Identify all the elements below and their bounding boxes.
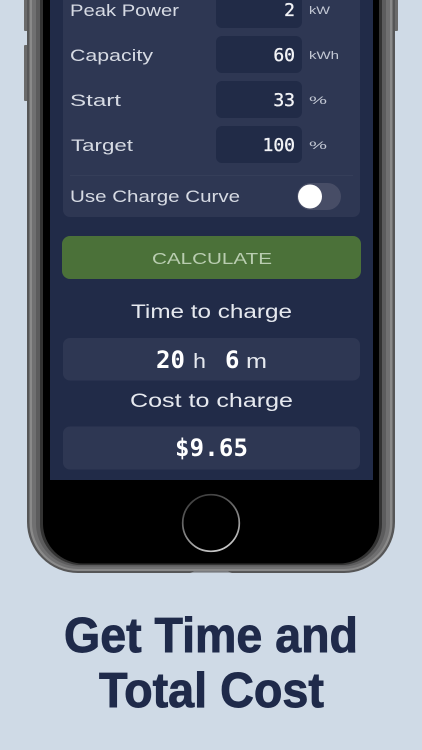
row: start: % bbox=[309, 95, 327, 107]
toggle bbox=[297, 183, 341, 210]
title bbox=[64, 609, 358, 718]
calculate button: CALCULATE bbox=[152, 251, 272, 268]
app screen bbox=[50, 0, 373, 480]
result: time: h bbox=[193, 351, 206, 373]
row: peak power bbox=[70, 0, 331, 28]
row: target: % bbox=[309, 140, 327, 152]
row: target bbox=[71, 126, 327, 163]
result: time bbox=[63, 338, 360, 380]
row: start: 33 bbox=[273, 90, 295, 111]
heading: time to charge: Time to charge bbox=[131, 302, 292, 323]
panel: inputs bbox=[63, 0, 360, 217]
result: cost bbox=[63, 426, 360, 470]
result: time: 20 bbox=[156, 346, 185, 374]
row: peak power: Peak Power bbox=[70, 1, 179, 20]
row: start: Start bbox=[70, 91, 121, 110]
side buttons bbox=[24, 0, 398, 101]
row: use charge curve bbox=[70, 183, 341, 210]
row: target: Target bbox=[71, 136, 133, 155]
bottom notch bbox=[190, 572, 232, 573]
calculate button bbox=[62, 236, 361, 279]
row: use charge curve: Use Charge Curve bbox=[70, 187, 240, 206]
phone mockup bbox=[24, 0, 398, 573]
result: cost: $9.65 bbox=[175, 434, 248, 462]
result: time: 6 bbox=[225, 346, 239, 374]
heading: cost to charge: Cost to charge bbox=[130, 391, 293, 412]
title: Get Time and bbox=[64, 609, 358, 663]
row: capacity bbox=[70, 36, 339, 73]
title: Total Cost bbox=[99, 664, 324, 718]
row: peak power: 2 bbox=[284, 0, 295, 21]
result: time: m bbox=[246, 351, 267, 373]
row: capacity: kWh bbox=[309, 50, 339, 62]
row: target: 100 bbox=[262, 135, 295, 156]
row: capacity: Capacity bbox=[70, 46, 154, 65]
row: capacity: 60 bbox=[273, 45, 295, 66]
home button bbox=[183, 495, 239, 551]
row: start bbox=[70, 81, 327, 118]
phone frame bbox=[27, 0, 395, 573]
row: peak power: kW bbox=[309, 5, 331, 17]
phone bezel bbox=[43, 0, 379, 564]
